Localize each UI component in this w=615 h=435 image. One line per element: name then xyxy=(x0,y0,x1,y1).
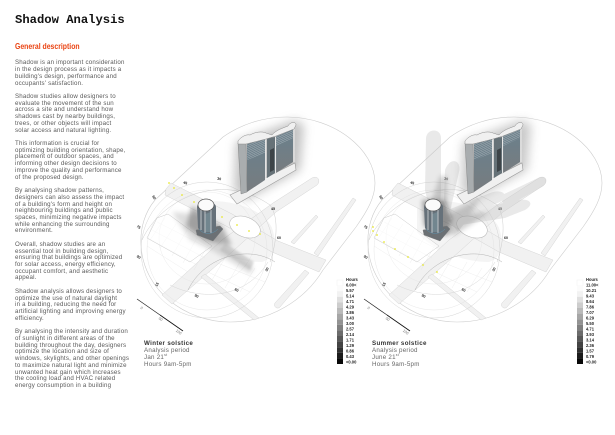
building: far tower, winter xyxy=(230,120,304,204)
text block: paragraph 4: By analysing shadow patterns, designers can also assess the impact of a building's form and height on neighbouring buildings and public spaces, minimizing negative impacts while enhancing the surrounding environment. xyxy=(15,187,124,234)
legend: summer hours: 7.07 xyxy=(586,310,595,315)
caption: winter solstice: Analysis period Jan 21st Hours 9am-5pm xyxy=(144,347,192,368)
legend: summer hours: 6.29 xyxy=(586,316,595,320)
text block: paragraph 7: By analysing the intensity and duration of sunlight in different areas of the building throughout the day, designers optimize the location and size of windows, skylights, and other openings to maximize natural light and minimize unwanted heat gain which increases the cooling load and HVAC related energy consumption in a building xyxy=(15,328,129,389)
legend: summer hours: 3.93 xyxy=(586,332,595,337)
legend: summer hours xyxy=(577,277,599,364)
scale bar: winter: 0 xyxy=(140,306,144,310)
legend: winter hours: 4.29 xyxy=(346,304,355,310)
legend: winter hours: 6.00< xyxy=(346,282,357,288)
legend: summer hours: 5.50 xyxy=(586,321,595,326)
title: Shadow Analysis xyxy=(15,13,125,27)
caption: summer solstice xyxy=(372,340,427,368)
shadow map: summer xyxy=(422,130,546,236)
legend: summer hours: 0.79 xyxy=(586,354,595,359)
text block: paragraph 2: Shadow studies allow designers to evaluate the movement of the sun across a site and understand how shadows cast by nearby buildings, trees, or other objects will impact solar access and natural lighting. xyxy=(15,93,116,134)
scale bar: summer: 100 xyxy=(402,329,409,336)
shadow map: winter xyxy=(172,206,254,274)
legend: winter hours: 5.57 xyxy=(346,288,355,293)
legend: winter hours: 2.57 xyxy=(346,326,355,332)
text block: paragraph 6: Shadow analysis allows designers to optimize the use of natural daylight in a building, reducing the need for artificial lighting and improving energy efficiency. xyxy=(15,288,126,322)
legend: winter hours: 5.14 xyxy=(346,294,355,298)
legend: winter hours: Hours xyxy=(346,277,359,282)
legend: winter hours xyxy=(337,277,359,364)
legend: winter hours: 1.71 xyxy=(346,338,355,342)
heading: general description: General description xyxy=(15,42,80,51)
legend: summer hours: 2.36 xyxy=(586,343,595,348)
sun path markers xyxy=(372,226,438,273)
text block: paragraph 3: This information is crucial for optimizing building orientation, shape, placement of outdoor spaces, and informing other design decisions to improve the quality and performance of the proposed design. xyxy=(15,140,126,181)
site plan: winter solstice xyxy=(136,117,375,322)
text block: paragraph 5: Overall, shadow studies are an essential tool in building design, ensuring that buildings are optimized for solar access, energy efficiency, occupant comfort, and aesthetic appeal. xyxy=(15,241,122,281)
legend: summer hours: 9.43 xyxy=(586,294,595,298)
scale bar: summer: 0 xyxy=(367,306,371,310)
legend: summer hours: 11.00< xyxy=(586,282,599,288)
building: far tower, summer xyxy=(457,120,531,204)
legend: summer hours: <0.00 xyxy=(586,360,597,364)
caption: winter solstice: Winter solstice xyxy=(144,340,193,347)
legend: winter hours: 1.29 xyxy=(346,343,355,348)
scale bar: summer xyxy=(364,299,410,336)
legend: summer hours: 10.21 xyxy=(586,288,597,293)
legend: summer hours: Hours xyxy=(586,277,599,282)
legend: winter hours: <0.00 xyxy=(346,360,357,364)
building: near tower, winter xyxy=(196,199,223,241)
text block: paragraph 1: Shadow is an important consideration in the design process as it impacts a building's design, performance and occupants' satisfaction. xyxy=(15,59,125,87)
legend: summer hours: 8.64 xyxy=(586,299,595,304)
sun path markers xyxy=(168,182,261,235)
legend: winter hours: 3.00 xyxy=(346,321,355,326)
legend: winter hours: 3.43 xyxy=(346,316,355,320)
scale bar: winter: 50 xyxy=(158,316,163,322)
legend: winter hours: 4.71 xyxy=(346,299,355,304)
legend: winter hours: 0.86 xyxy=(346,348,355,354)
scale bar: winter: 100 xyxy=(175,329,182,336)
legend: summer hours: 3.14 xyxy=(586,338,595,342)
legend: winter hours: 2.14 xyxy=(346,332,355,337)
site plan: summer solstice xyxy=(363,117,602,322)
legend: summer hours: 7.86 xyxy=(586,304,595,310)
scale bar: winter xyxy=(137,299,183,336)
scale bar: summer: 50 xyxy=(385,316,390,322)
legend: winter hours: 3.86 xyxy=(346,310,355,315)
caption: summer solstice: Summer solstice xyxy=(372,340,427,347)
caption: summer solstice: Analysis period June 21st Hours 9am-5pm xyxy=(372,347,420,368)
legend: summer hours: 1.57 xyxy=(586,348,595,354)
building: near tower, summer xyxy=(423,199,450,241)
legend: summer hours: 4.71 xyxy=(586,326,595,332)
legend: winter hours: 0.43 xyxy=(346,354,355,359)
